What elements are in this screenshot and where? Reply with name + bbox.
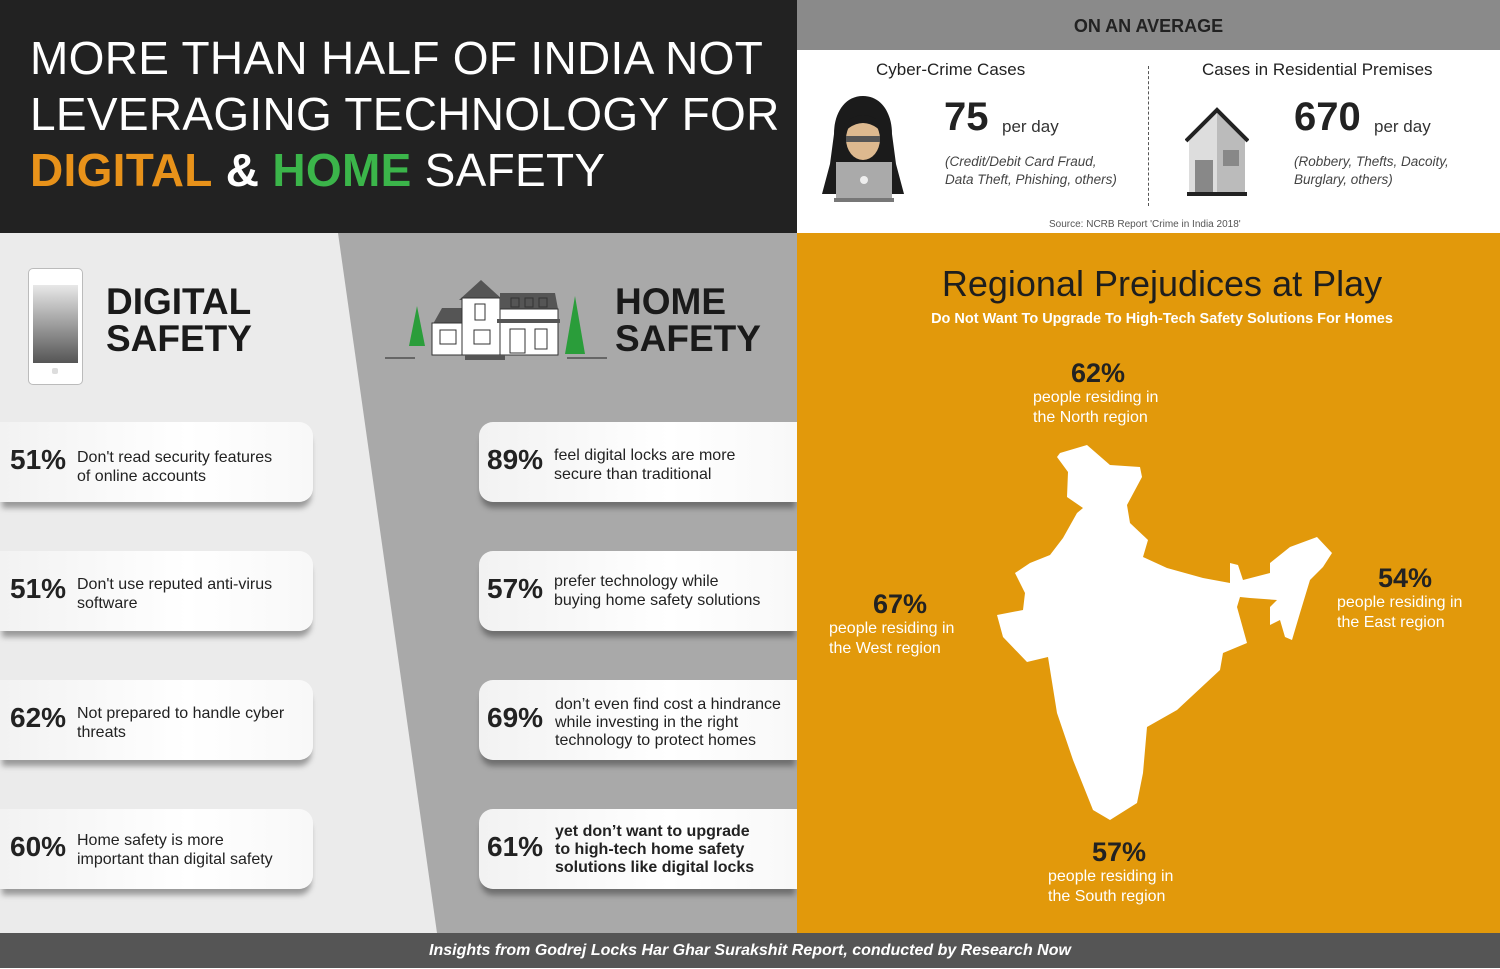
card: digital 4: 60% [10,831,66,862]
title [30,32,780,196]
card: digital 2: 51% [10,573,66,604]
label: west: 67% [873,589,927,619]
label: east: 54% [1378,563,1432,593]
card: digital 3 [0,680,313,760]
footer: Insights from Godrej Locks Har Ghar Surakshit Report, conducted by Research Now [429,942,1071,959]
heading: home safety: HOME [615,281,726,322]
card: digital 2: Don't use reputed anti-virus [77,576,272,593]
title: MORE THAN HALF OF INDIA NOT [30,32,763,84]
icon: phone [28,268,83,385]
source note: Source: NCRB Report 'Crime in India 2018' [1049,219,1241,230]
card: home 2 [479,551,797,631]
card: home 1: feel digital locks are more [554,447,735,464]
footer [0,933,1500,968]
heading: digital safety: DIGITAL [106,281,251,322]
heading: home safety: SAFETY [615,318,761,359]
card: home 4: 61% [487,831,543,862]
icon: house [1185,107,1249,196]
residential block: Cases in Residential Premises [1202,60,1433,79]
card: home 2: prefer technology while [554,573,719,590]
cyber-crime block: per day [1002,117,1059,136]
heading: regional prejudices: Regional Prejudices at Play [942,263,1382,304]
card: digital 2: software [77,595,137,612]
heading: home safety [615,281,761,359]
heading: digital safety: SAFETY [106,318,252,359]
card: digital 1: 51% [10,444,66,475]
residential block: (Robbery, Thefts, Dacoity, [1294,154,1449,169]
card: home 4: yet don’t want to upgrade [555,823,750,840]
card: home 3: while investing in the right [555,714,738,731]
heading: on an average: ON AN AVERAGE [1074,16,1223,36]
label: south: people residing in [1048,868,1173,885]
card: digital 2 [0,551,313,631]
card: home 4: solutions like digital locks [555,859,754,876]
panel background: gray home safety [0,233,797,933]
card: home 3: don’t even find cost a hindrance [555,696,781,713]
card: home 3 [479,680,797,760]
label: north: the North region [1033,409,1148,426]
card: home 4: to high-tech home safety [555,841,744,858]
card: home 3: technology to protect homes [555,732,756,749]
title: LEVERAGING TECHNOLOGY FOR [30,88,780,140]
header: dark title panel [0,0,797,233]
heading: digital safety [106,281,252,359]
card: home 2: buying home safety solutions [554,592,760,609]
card: home 2: 57% [487,573,543,604]
label: north: people residing in [1033,389,1158,406]
cyber-crime block: Cyber-Crime Cases [876,60,1025,79]
card: home 1: 89% [487,444,543,475]
title: DIGITAL & HOME SAFETY [30,144,605,196]
label: north [1033,358,1158,426]
label: south: 57% [1092,837,1146,867]
cyber-crime block [822,60,1117,202]
card: digital 1: of online accounts [77,468,206,485]
icon: hacker [822,96,904,202]
label: south: the South region [1048,888,1165,905]
card: digital 3: threats [77,724,126,741]
label: east: the East region [1337,614,1445,631]
icon: house with trees [385,280,607,360]
residential block: 670 [1294,95,1361,139]
cyber-crime block: (Credit/Debit Card Fraud, [945,154,1097,169]
residential block: per day [1374,117,1431,136]
card: home 1: secure than traditional [554,466,711,483]
label: west [829,589,954,657]
residential block [1185,60,1449,196]
label: north: 62% [1071,358,1125,388]
card: home 3: 69% [487,702,543,733]
label: east: people residing in [1337,594,1462,611]
cyber-crime block: Data Theft, Phishing, others) [945,172,1117,187]
card: digital 4 [0,809,313,889]
card: home 4 [479,809,797,889]
label: west: the West region [829,640,941,657]
cyber-crime block: 75 [944,95,988,139]
panel: on an average [797,0,1500,233]
panel: regional prejudices [797,233,1500,933]
label: west: people residing in [829,620,954,637]
residential block: Burglary, others) [1294,172,1393,187]
card: digital 4: important than digital safety [77,851,273,868]
subheading: Do Not Want To Upgrade To High-Tech Safety Solutions For Homes [931,311,1393,327]
heading: on an average [797,0,1500,50]
card: digital 1: Don't read security features [77,449,272,466]
card: digital 1 [0,422,313,502]
map: India [997,445,1332,820]
card: digital 3: 62% [10,702,66,733]
panel: digital safety [0,233,440,933]
card: digital 4: Home safety is more [77,832,224,849]
card: digital 3: Not prepared to handle cyber [77,705,284,722]
label: east [1337,563,1462,631]
label: south [1048,837,1173,905]
card: home 1 [479,422,797,502]
